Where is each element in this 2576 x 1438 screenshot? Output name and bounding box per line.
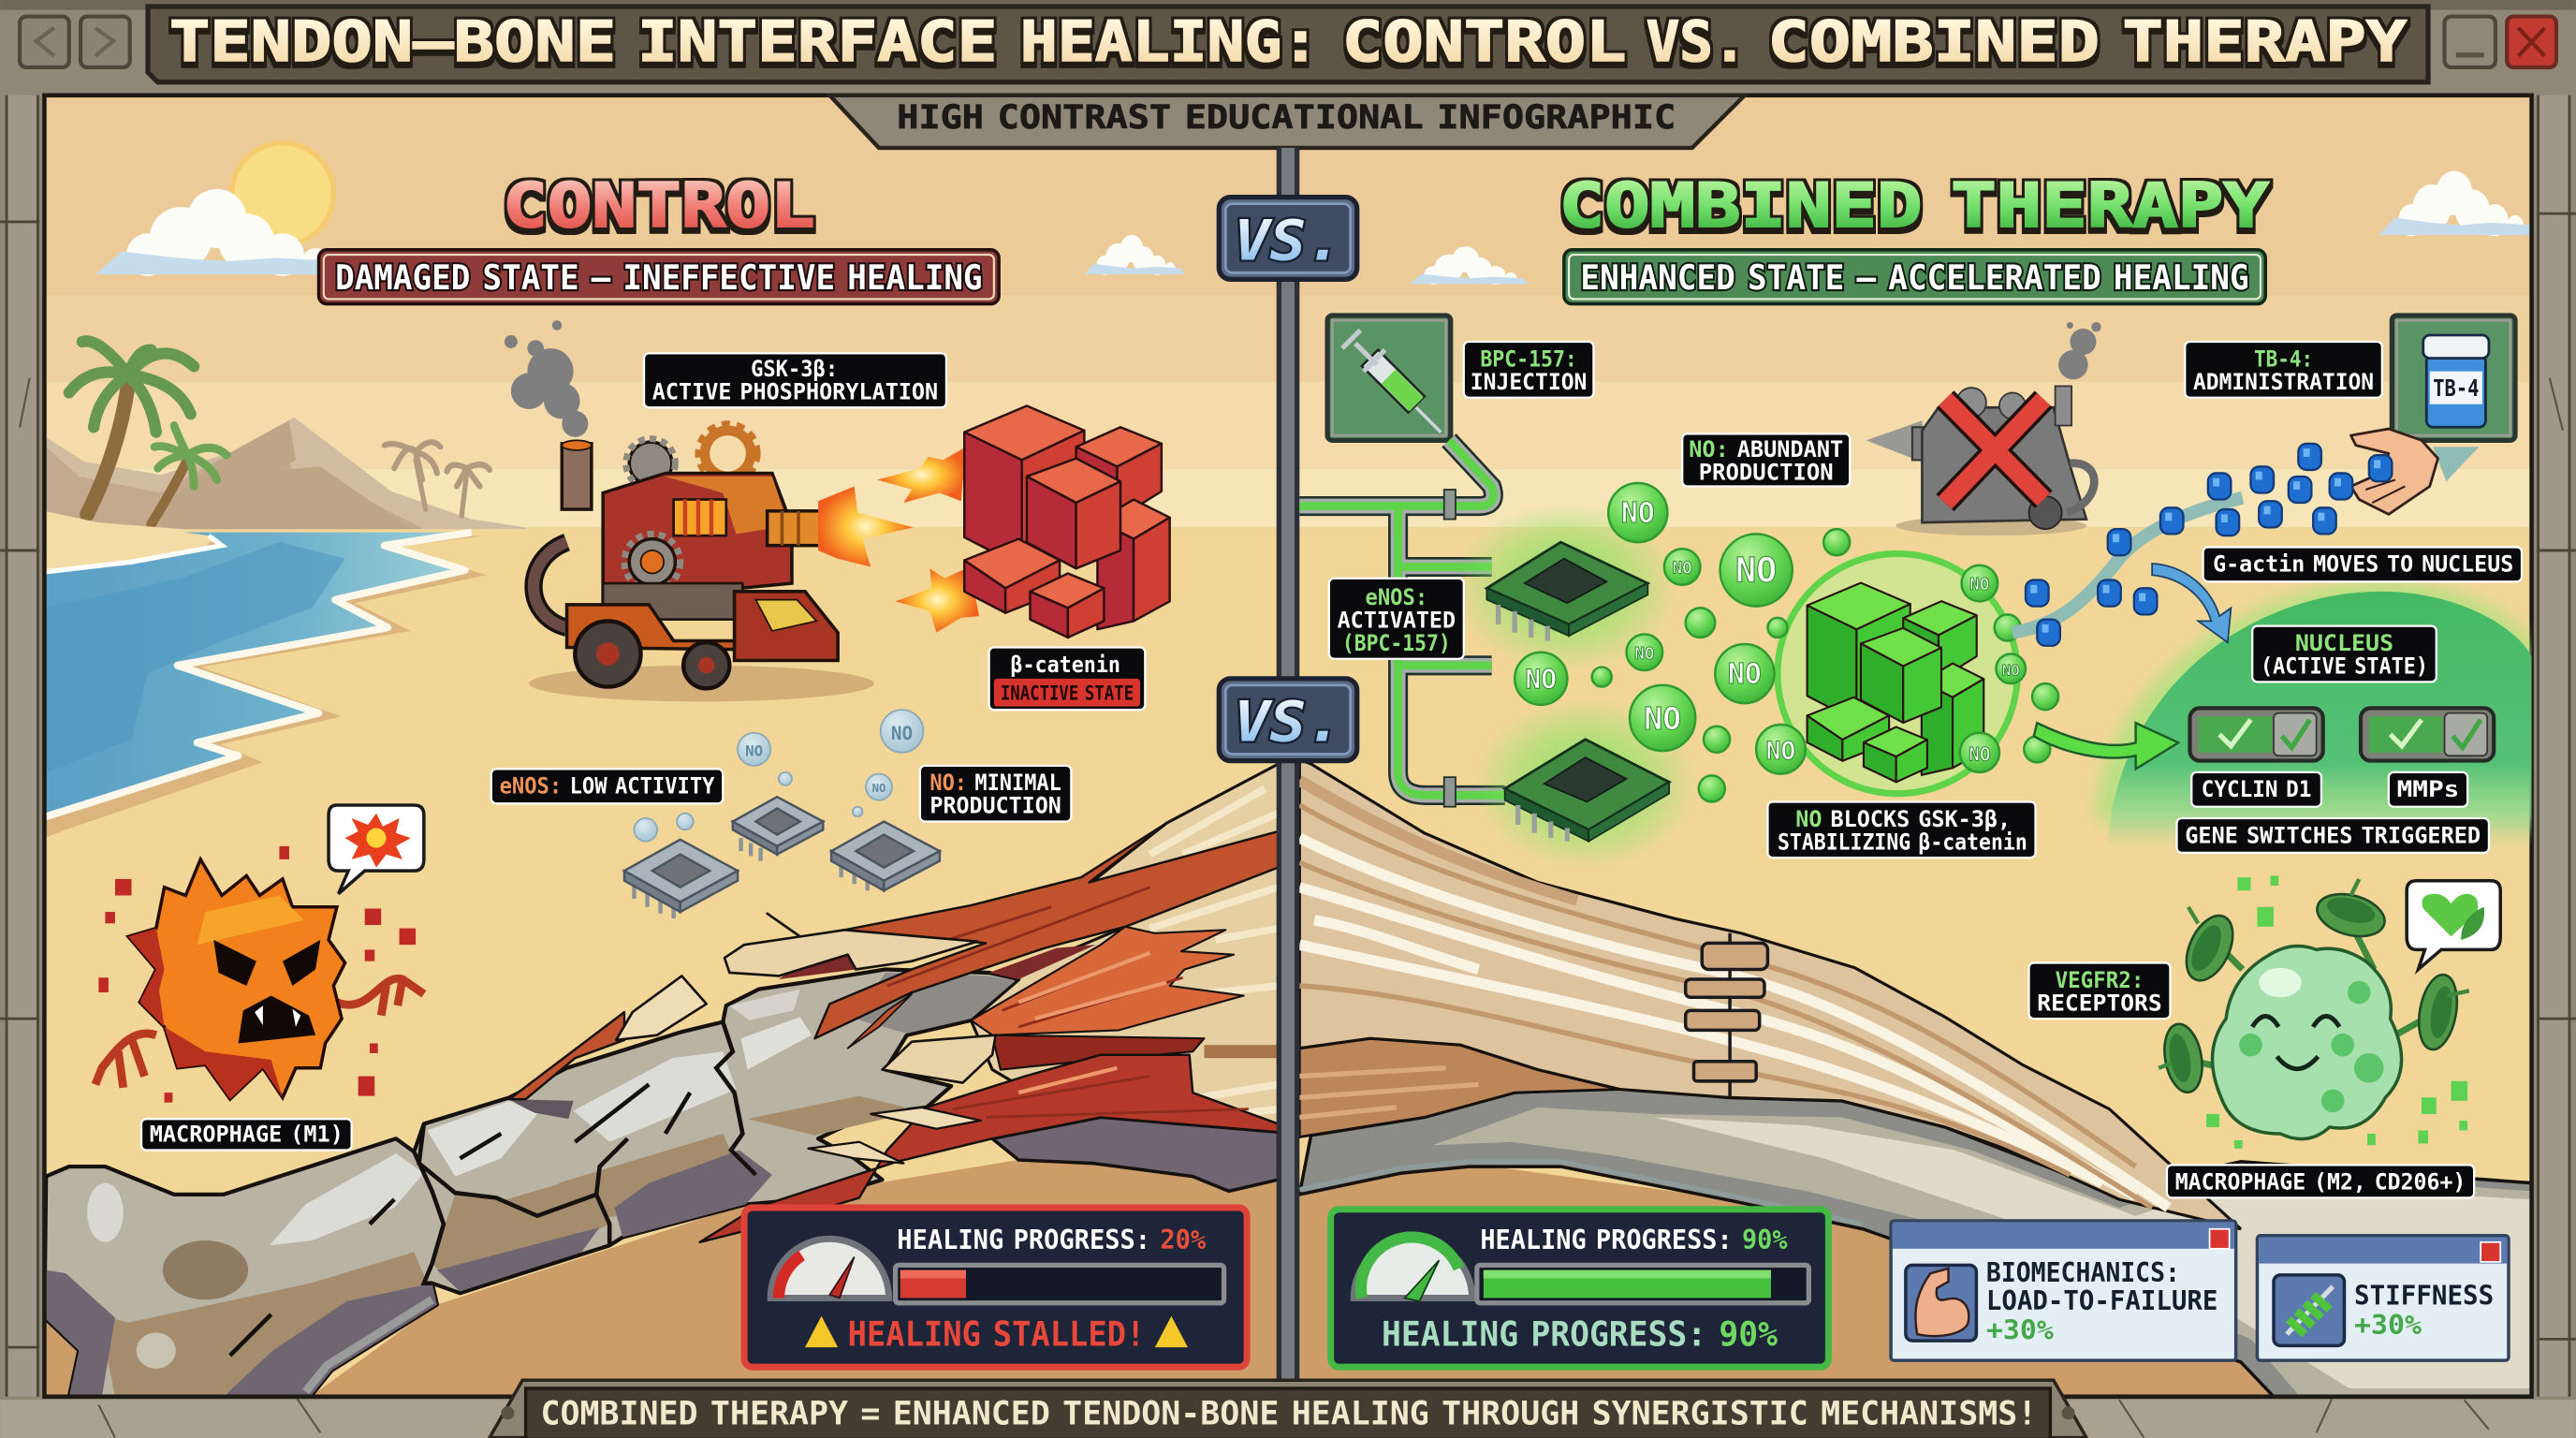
label: beta-catenin inactive: INACTIVE STATE <box>1001 682 1134 705</box>
label: eNOS activated: ACTIVATED <box>1338 607 1456 633</box>
beta-catenin block inactive <box>964 405 1170 638</box>
progress label: control: HEALING PROGRESS: 20% <box>897 1225 1206 1255</box>
ocean water <box>44 533 487 838</box>
label: BPC-157 injection: INJECTION <box>1471 369 1587 395</box>
title text: HEALING: <box>1020 10 1319 75</box>
HUD: control progress <box>744 1208 1247 1367</box>
label: GSK-3 beta: GSK-3β: <box>751 356 838 382</box>
NO bubble text: NO <box>1621 497 1655 530</box>
flames <box>818 447 979 633</box>
label: cyclin D1 <box>2191 772 2321 807</box>
NO gas bubbles <box>1515 483 2058 801</box>
progress bar: combined <box>1477 1265 1808 1303</box>
sand island <box>47 511 213 569</box>
NO bubble text: NO <box>1673 560 1692 579</box>
title text: THERAPY <box>2123 10 2407 75</box>
label: BPC-157 injection <box>1464 342 1593 398</box>
title text: COMBINED <box>1767 10 2100 75</box>
label: nucleus active <box>2252 626 2437 682</box>
NO bubble text: NO <box>1735 550 1777 590</box>
faint NO bubbles: NO <box>872 782 886 795</box>
label: GSK-3 beta <box>644 353 946 407</box>
speech bubble burst <box>329 805 424 894</box>
G-actin trail <box>2012 498 2243 633</box>
NO bubble text: NO <box>1766 738 1795 766</box>
speech bubble heart <box>2407 881 2500 969</box>
big protective bubble <box>1778 553 2017 794</box>
macrophage M2 <box>2159 875 2469 1149</box>
label: beta-catenin inactive <box>989 647 1145 710</box>
title text: VS. <box>1647 10 1747 75</box>
green arrow to nucleus <box>2034 723 2178 769</box>
syringe box <box>1327 315 1451 440</box>
toggle: MMPs <box>2361 708 2494 761</box>
label: NO blocks GSK-3 beta: NO BLOCKS GSK-3β, <box>1795 806 2011 832</box>
grey chips low eNOS <box>624 797 940 918</box>
label: NO minimal production: PRODUCTION <box>929 793 1061 819</box>
palm trees <box>69 341 490 524</box>
cloud: top left <box>95 189 322 276</box>
left red torn fibres <box>509 823 1278 1242</box>
label: NO minimal production: NO: MINIMAL <box>929 770 1061 796</box>
label: VEGFR2 <box>2029 962 2170 1019</box>
label: eNOS activated <box>1329 579 1464 659</box>
label: eNOS low activity: eNOS: LOW ACTIVITY <box>500 773 715 800</box>
sutures <box>1686 933 1767 1097</box>
cloud: top right <box>2378 171 2539 236</box>
hand <box>2351 429 2479 514</box>
cloud: small centre right <box>1410 246 1529 285</box>
window: biomechanics <box>1891 1221 2236 1360</box>
label: macrophage M2: MACROPHAGE (M2, CD206+) <box>2175 1169 2466 1196</box>
NO bubble text: NO <box>1525 664 1557 695</box>
window: stiffness: +30% <box>2354 1310 2422 1341</box>
G-actin particles <box>2026 444 2392 646</box>
progress bar: control <box>896 1265 1224 1303</box>
label: macrophage M1: MACROPHAGE (M1) <box>150 1122 344 1148</box>
lower shaded sand <box>44 1160 2274 1397</box>
right tendon muscle <box>1299 1038 1620 1137</box>
window: stiffness: STIFFNESS <box>2354 1280 2494 1311</box>
beta-catenin block stabilized <box>1808 583 1983 782</box>
label: TB-4 administration <box>2185 342 2382 398</box>
window: biomechanics: BIOMECHANICS: <box>1986 1257 2180 1288</box>
glow chips <box>1454 501 1697 869</box>
NO bubble text: NO <box>1728 658 1762 691</box>
faint NO bubbles: NO <box>891 723 913 744</box>
label: nucleus active: NUCLEUS <box>2295 630 2393 656</box>
label: beta-catenin inactive: β-catenin <box>1010 652 1120 678</box>
right tendon repaired <box>1299 759 2241 1229</box>
label: G-actin moves: G-actin MOVES TO NUCLEUS <box>2213 551 2513 578</box>
HUD: combined progress <box>1331 1210 1828 1367</box>
label: cyclin D1: CYCLIN D1 <box>2202 776 2311 802</box>
icon: spring <box>2274 1275 2344 1345</box>
mountains <box>46 418 526 529</box>
subtitle: damaged state <box>319 250 999 304</box>
macrophage M1 <box>95 846 424 1103</box>
right light bone end <box>1299 1088 2532 1397</box>
toggle: cyclin D1 <box>2190 708 2323 761</box>
icon: syringe <box>1342 330 1441 433</box>
heading: control: CONTROL <box>503 171 815 242</box>
title text <box>169 10 2407 75</box>
nucleus <box>2096 581 2539 871</box>
label: nucleus active: (ACTIVE STATE) <box>2261 653 2428 680</box>
NO bubble text: NO <box>1969 744 1990 766</box>
footer banner <box>490 1380 2086 1438</box>
window: biomechanics: LOAD-TO-FAILURE <box>1986 1285 2217 1316</box>
stalled warning: HEALING STALLED! <box>848 1313 1145 1354</box>
window: biomechanics: +30% <box>1986 1314 2054 1345</box>
label: NO minimal production <box>920 766 1071 822</box>
VS badge lower <box>1219 679 1357 761</box>
icon: muscle <box>1906 1265 1976 1341</box>
subtitle: damaged state: DAMAGED STATE – INEFFECTIVE HEALING <box>335 257 983 298</box>
VS badge top <box>1219 198 1357 279</box>
pipes <box>1299 440 1505 807</box>
NO bubble text: NO <box>1634 645 1654 664</box>
gauge: control <box>770 1239 889 1298</box>
label: eNOS activated: (BPC-157) <box>1342 630 1451 656</box>
faint NO bubbles: NO <box>745 741 763 759</box>
label: TB-4 administration: TB-4: <box>2254 345 2313 372</box>
label: TB-4 administration: ADMINISTRATION <box>2193 369 2374 395</box>
label: VEGFR2: VEGFR2: <box>2056 967 2144 993</box>
red X <box>1945 399 2043 503</box>
label: eNOS activated: eNOS: <box>1365 584 1427 610</box>
progress label: combined: HEALING PROGRESS: 90% <box>1480 1225 1788 1255</box>
window buttons right <box>2445 17 2556 67</box>
label: MMPs <box>2389 772 2467 807</box>
title text: TENDON—BONE <box>169 10 616 75</box>
label: NO blocks GSK-3 beta: STABILIZING β-catenin <box>1778 829 2027 855</box>
gauge: combined <box>1354 1238 1472 1301</box>
NO bubble text: NO <box>1644 700 1681 737</box>
GSK-3 beta machine active <box>505 320 874 701</box>
label: NO abundant production: PRODUCTION <box>1699 459 1834 485</box>
heading: combined therapy: COMBINED THERAPY <box>1559 171 2269 242</box>
left tendon base <box>971 764 1278 1134</box>
VS badge top: VS. <box>1234 209 1342 273</box>
centre divider <box>1277 148 1299 1388</box>
subtitle plate: HIGH CONTRAST EDUCATIONAL INFOGRAPHIC <box>897 98 1676 137</box>
label: NO blocks GSK-3 beta <box>1767 801 2036 858</box>
VS badge lower: VS. <box>1234 691 1342 756</box>
NO bubble text <box>1525 497 2020 766</box>
label: GSK-3 beta: ACTIVE PHOSPHORYLATION <box>652 378 938 404</box>
label: MMPs: MMPs <box>2397 776 2459 802</box>
title bar <box>148 7 2428 82</box>
icon: vial TB-4: TB-4 <box>2433 374 2479 402</box>
label: NO abundant production <box>1682 433 1850 486</box>
title text: CONTROL <box>1342 10 1627 75</box>
progress headline: combined: HEALING PROGRESS: 90% <box>1382 1313 1778 1354</box>
left bone fractured <box>44 969 1018 1397</box>
faint NO bubbles <box>634 710 923 842</box>
label: gene switches: GENE SWITCHES TRIGGERED <box>2185 822 2481 848</box>
GSK-3 beta machine blocked <box>1866 322 2101 536</box>
subtitle plate <box>829 95 1745 148</box>
TB-4 box <box>2392 315 2515 440</box>
left dark bone strip <box>992 1117 1278 1191</box>
cloud: small centre left <box>1084 235 1186 275</box>
subtitle: enhanced state: ENHANCED STATE – ACCELERATED HEALING <box>1580 257 2249 298</box>
NO bubble text: NO <box>2002 661 2020 679</box>
sun <box>232 143 333 244</box>
label: BPC-157 injection: BPC-157: <box>1480 345 1577 372</box>
title text: INTERFACE <box>637 10 997 75</box>
footer banner: COMBINED THERAPY = ENHANCED TENDON-BONE HEALING THROUGH SYNERGISTIC MECHANISMS! <box>540 1395 2037 1433</box>
label: NO abundant production: NO: ABUNDANT <box>1689 436 1843 462</box>
NO bubble text: NO <box>1969 576 1989 594</box>
window: stiffness <box>2257 1236 2509 1360</box>
label: VEGFR2: RECEPTORS <box>2037 990 2162 1016</box>
blue arrow to nucleus <box>2152 564 2231 642</box>
window buttons left <box>20 17 130 67</box>
